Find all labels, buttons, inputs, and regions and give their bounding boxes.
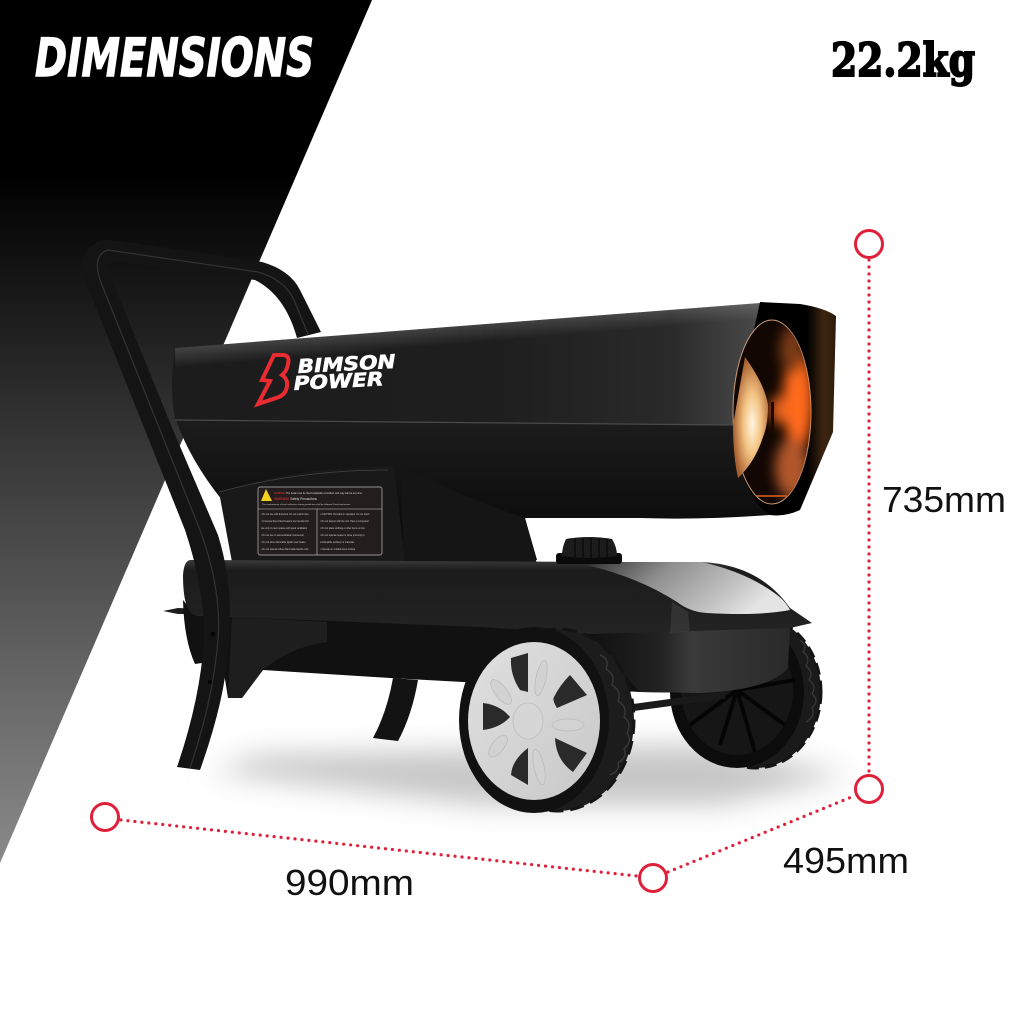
tyre sidewall (459, 627, 609, 813)
pedestal under barrel (400, 466, 537, 564)
fuel tank (163, 537, 812, 698)
front wheel (459, 627, 634, 813)
axle (630, 695, 725, 708)
tank lower body (183, 600, 790, 698)
safety label: • Do not store flammable liquids near heater (261, 541, 306, 544)
dimension depth: dotted line (668, 796, 854, 872)
tank upper body (183, 560, 812, 634)
safety label: The requirements of local authorities having jurisdiction shall be followed. Read instructions (262, 503, 351, 506)
side panel (219, 466, 405, 562)
logo mark: red lightning B (258, 355, 288, 404)
label: 735mm: 735mm (882, 479, 1006, 520)
safety label: • CAUTION: Hot while in operation. Do not touch (320, 513, 370, 516)
safety label: • Do not operate where flammable liquids exist (261, 548, 309, 551)
rear rim ring (670, 616, 804, 768)
burner opening (733, 320, 813, 504)
tank back flange (163, 608, 200, 614)
safety label: • Do not place clothing or other items on top (320, 527, 365, 530)
safety label: • Operate on a stable level surface (320, 548, 356, 551)
spoke openings (483, 653, 587, 785)
weight: 22.2kg: 22.2kg (831, 33, 975, 87)
rear tread (691, 616, 821, 768)
tyre tread (482, 629, 634, 811)
safety label: combustible surfaces or materials (320, 541, 355, 544)
rear hub ribs (681, 625, 795, 755)
safety label: • Do not use in well-ventilated commercial (261, 534, 304, 537)
safety label: • Do not operate heater in close proximity to (320, 534, 365, 537)
tank right section (592, 627, 790, 693)
dimension height: dotted line with end markers (856, 230, 882, 802)
brand logo: POWER (293, 368, 384, 395)
safety label: • Unvented direct-fired heaters are intended for (261, 520, 309, 523)
logo wordmark: BIMSON (297, 351, 396, 378)
title: DIMENSIONS: DIMENSIONS (35, 28, 314, 89)
reflector cone (733, 357, 768, 478)
hub cap (513, 703, 543, 739)
barrel ridge line (175, 420, 733, 425)
handle frame (82, 240, 321, 770)
safety label: WARNING The heater can be thermostatically controlled, and may start at any time (274, 492, 363, 495)
rear support leg (373, 678, 418, 741)
tread wiggle (600, 655, 629, 775)
rear tread wiggle (800, 640, 816, 722)
tank top grey surface (587, 562, 790, 614)
safety label (258, 487, 382, 555)
safety label: • Do not use with ductwork. Do not restrict inlet (261, 513, 309, 516)
heater barrel (172, 302, 836, 560)
ground shadow (210, 745, 850, 805)
label: 495mm: 495mm (783, 840, 909, 881)
tank soft vertical highlight (670, 602, 690, 633)
handle highlight ridge (97, 250, 308, 768)
dimension length: dotted line with end markers (92, 804, 666, 892)
nozzle cowl (733, 302, 836, 515)
top sheen (175, 303, 760, 368)
fuel cap (556, 537, 622, 564)
black diagonal background panel (0, 0, 372, 863)
safety label: • Do not tamper with the unit. Have a competent (320, 520, 369, 523)
embossed ovals (485, 659, 584, 786)
rear wheel (670, 616, 821, 768)
warning triangle (261, 489, 272, 501)
lower barrel body (176, 420, 770, 560)
hub face (468, 642, 600, 800)
handle rivets (208, 632, 215, 684)
burner bracket (771, 402, 774, 430)
upper barrel shell (172, 303, 760, 425)
safety label: WARNING Safety Precautions (274, 497, 317, 501)
brand logo (258, 351, 396, 404)
safety label: use only in open spaces with good ventilation (261, 527, 308, 530)
orange glow (752, 326, 813, 498)
label: 990mm: 990mm (285, 862, 414, 903)
tank bracket (228, 617, 327, 698)
